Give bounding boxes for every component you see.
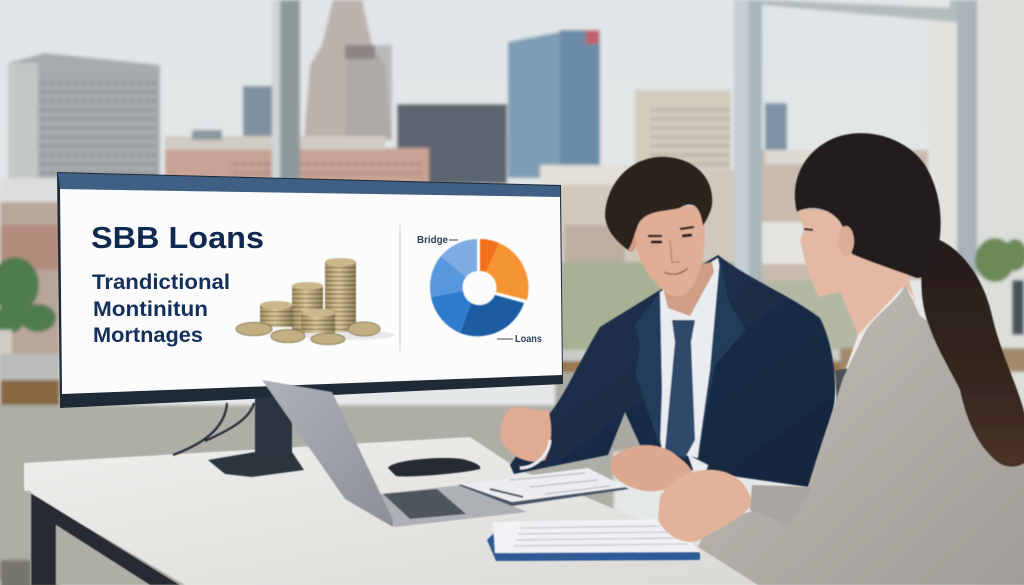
paper stack [487, 519, 701, 561]
slide subtitle lines [92, 271, 230, 347]
building: dark block [397, 104, 507, 184]
clipboard document [458, 468, 629, 506]
hair [605, 157, 712, 250]
donut chart [430, 239, 529, 336]
slide subtitle lines: Trandictional [92, 271, 230, 294]
face [630, 205, 705, 296]
shirt [657, 258, 724, 458]
chair [835, 368, 856, 425]
slide title: SBB Loans [91, 220, 264, 255]
laptop keyboard [383, 489, 466, 519]
slide divider [399, 225, 401, 351]
monitor [57, 172, 563, 408]
lapels [635, 258, 745, 462]
suit jacket [510, 255, 835, 487]
facial features [648, 227, 694, 274]
left hand on table [610, 445, 693, 491]
chart label: Bridge: Bridge [417, 235, 448, 246]
plant: right corner [975, 238, 1024, 335]
monitor blue header band [58, 173, 560, 197]
plant: left window [0, 257, 56, 380]
slide subtitle lines: Mortnages [93, 324, 203, 347]
building: grey tower left [8, 53, 160, 182]
hands on table [658, 470, 752, 542]
sleeve [750, 485, 812, 525]
monitor bezel [57, 172, 563, 408]
mouse [388, 458, 480, 476]
jacket body [698, 284, 1024, 585]
ear [838, 226, 854, 256]
slide subtitle lines: Montinitun [93, 298, 208, 321]
chart label: Loans: Loans [515, 334, 542, 345]
mid-distance buildings right of monitor [540, 150, 950, 354]
neck [660, 262, 714, 316]
cuff [520, 440, 550, 468]
ponytail [921, 236, 1024, 467]
tie [665, 320, 695, 458]
laptop lid [262, 380, 393, 527]
woman from behind [658, 133, 1024, 585]
laptop base [345, 485, 527, 527]
screen slide [60, 189, 562, 394]
laptop [262, 380, 527, 527]
ear [626, 234, 636, 252]
building: cream tower [635, 90, 731, 180]
right hand gesturing [500, 407, 551, 462]
table [24, 437, 800, 585]
window mullions and frame [272, 0, 1024, 585]
chart label: Loans [497, 334, 542, 345]
building: blue glass tower [508, 30, 600, 178]
icon: coin stacks [236, 258, 395, 344]
building: brick low rise [165, 130, 429, 184]
building: clock tower [304, 0, 392, 140]
man in navy suit [500, 157, 856, 491]
building: small blue block [243, 86, 275, 146]
neck and face [798, 210, 915, 335]
blouse [846, 285, 914, 385]
eye lashes [804, 229, 813, 230]
hair and head [795, 133, 941, 278]
window sill and wall [0, 348, 1024, 580]
monitor stand and cable [173, 395, 304, 477]
